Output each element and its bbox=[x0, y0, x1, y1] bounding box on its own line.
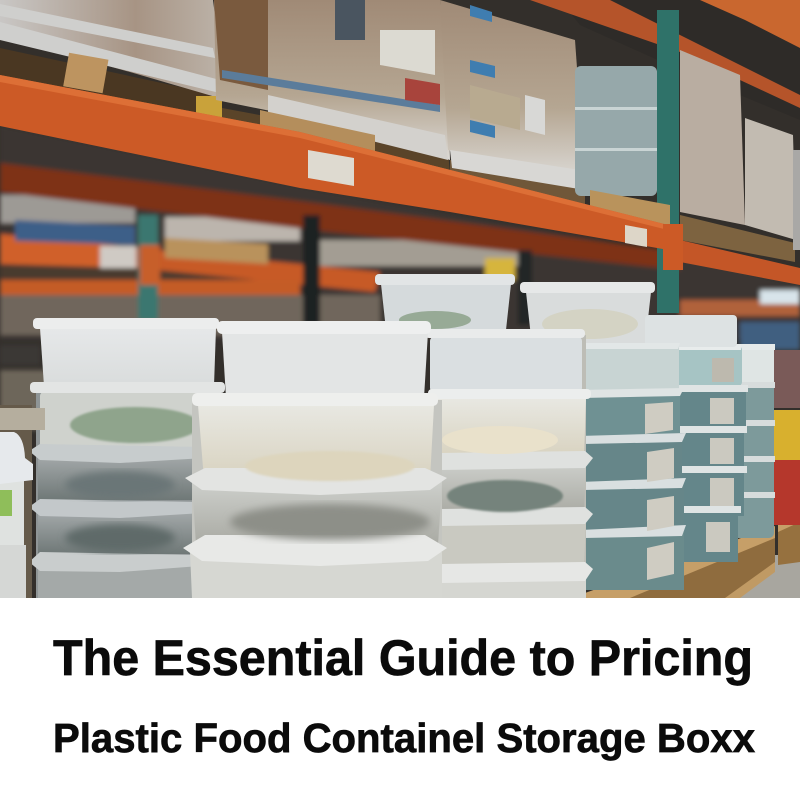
boxes at far right bbox=[765, 350, 800, 525]
orange shelf beam bbox=[0, 75, 800, 285]
stacked tubs on upper shelf bbox=[575, 66, 670, 232]
wrapped pallets far right bbox=[680, 50, 800, 262]
far-right container stack bbox=[728, 344, 775, 538]
title: The Essential Guide to Pricing bbox=[53, 630, 753, 686]
warehouse background bbox=[0, 125, 800, 430]
white caption band bbox=[0, 598, 800, 800]
wrapped pallet: right bbox=[440, 0, 585, 208]
centre stack bbox=[183, 321, 447, 598]
far-left white container bbox=[0, 405, 45, 598]
wrapped pallet: left bbox=[0, 0, 226, 122]
centre-right stack bbox=[425, 329, 593, 598]
left stack bbox=[29, 318, 225, 598]
right stack with labels bbox=[572, 343, 686, 590]
top container: green contents bbox=[375, 274, 515, 330]
far-right second container stack bbox=[672, 344, 748, 562]
subtitle: Plastic Food Containel Storage Boxx bbox=[53, 715, 755, 761]
top container: white contents bbox=[520, 282, 655, 346]
rear clear container bbox=[645, 315, 737, 347]
photo: warehouse shelving with stacked plastic containers bbox=[0, 0, 800, 598]
teal upright column bbox=[657, 10, 679, 313]
wrapped pallet: centre bbox=[214, 0, 450, 175]
upper racking dark underside bbox=[560, 0, 800, 120]
pallet under right stacks bbox=[585, 512, 800, 598]
